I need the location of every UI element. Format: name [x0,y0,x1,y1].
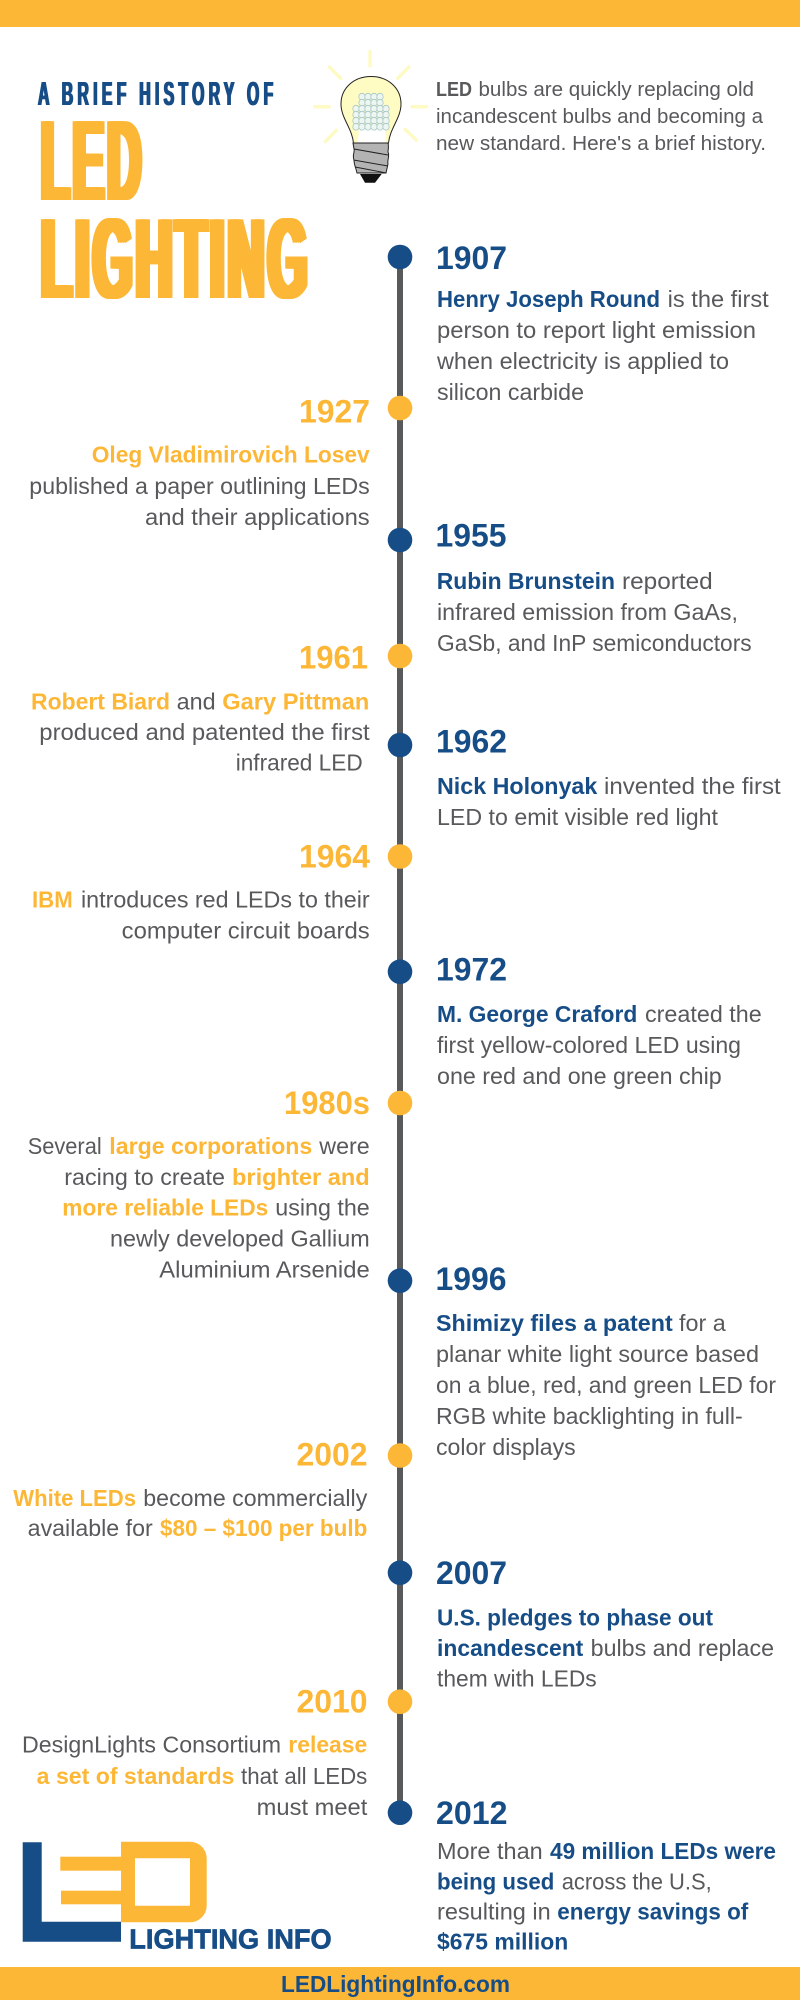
event: 2012: 49 million LEDs were [550,1838,776,1864]
event: 1972: one red and one green chip [437,1063,722,1089]
intro text: LED [436,78,472,101]
event: 1907: Henry Joseph Round [437,286,660,312]
event: 1907: 1907 [436,240,507,276]
event: 2007: incandescent [437,1635,584,1661]
event: 1962: invented the first [604,773,781,799]
event: 1955: GaSb, and InP semiconductors [437,630,752,656]
event: 1972: 1972 [436,952,507,988]
event: 2002: become commercially [143,1485,368,1511]
event: 1980s: newly developed Gallium [110,1226,370,1252]
event: 1996: on a blue, red, and green LED for [436,1372,776,1398]
event: 2007: bulbs and replace [591,1635,774,1661]
event: 2010: release [288,1732,367,1758]
event: 1972: first yellow-colored LED using [437,1032,741,1058]
title: LIGHTING: LIGHTING [41,196,311,323]
event: 1961: produced and patented the first [39,719,370,745]
logo: LED Lighting Info: LIGHTING INFO [129,1923,332,1954]
event: 1907: when electricity is applied to [436,348,729,374]
bottom banner [0,1967,800,2000]
event: 2012: across the U.S, [562,1868,712,1894]
top banner [0,0,800,27]
event: 1980s [28,1085,370,1283]
intro text: new standard. Here's a brief history. [436,132,766,155]
event: 1962: LED to emit visible red light [437,804,719,830]
event: 2002: $80 – $100 per bulb [160,1515,367,1541]
event: 2007: U.S. pledges to phase out [437,1604,713,1630]
event: 1996: for a [679,1310,726,1336]
event: 1964: IBM [32,886,73,912]
event: 2010: must meet [257,1794,368,1820]
event: 1955: Rubin Brunstein [437,568,615,594]
title [38,76,311,323]
event: 1980s: Several [28,1133,102,1159]
event: 1980s: large corporations [109,1133,312,1159]
event: 1996: color displays [436,1434,576,1460]
event: 1996: Shimizy files a patent [436,1310,673,1336]
event: 2010 [22,1684,368,1820]
event: 1955 [436,518,752,656]
event: 1980s: 1980s [284,1085,370,1121]
event: 1961: Gary Pittman [222,688,369,714]
event: 1927 [29,394,370,530]
event: 1964: introduces red LEDs to their [81,886,370,912]
event: 1980s: using the [275,1195,370,1221]
event: 2012: $675 million [437,1928,568,1954]
event: 1955: reported [622,568,713,594]
event: 2010: 2010 [296,1684,368,1720]
event: 1961 [31,640,370,776]
event: 1980s: were [318,1133,370,1159]
event: 1972: created the [645,1001,762,1027]
event: 1972: M. George Craford [437,1001,637,1027]
event: 1996: 1996 [436,1261,506,1297]
event: 1955: 1955 [436,518,506,554]
event: 1961: and [177,688,216,714]
event: 1962: Nick Holonyak [437,773,598,799]
event: 1927: published a paper outlining LEDs [29,473,370,499]
event: 1927: and their applications [145,504,370,530]
event: 2002: available for [28,1515,153,1541]
event: 2010: that all LEDs [241,1763,367,1789]
intro text: bulbs are quickly replacing old [478,78,754,101]
event: 1955: infrared emission from GaAs, [437,599,738,625]
title: a brief history of: A BRIEF HISTORY OF [38,76,277,113]
event: 2010: a set of standards [37,1763,234,1789]
event: 2012: energy savings of [557,1898,749,1924]
event: 2007 [436,1555,774,1692]
event: 1927: Oleg Vladimirovich Losev [92,442,370,468]
event: 1907 [436,240,769,405]
event: 1907: person to report light emission [437,317,756,343]
event: 2012: resulting in [437,1898,551,1924]
event: 2010: DesignLights Consortium [22,1732,281,1758]
event: 2002: White LEDs [13,1485,136,1511]
event: 2012: 2012 [436,1795,508,1831]
title: LED: LED [41,98,144,225]
event: 2002 [13,1437,368,1541]
event: 1964: computer circuit boards [122,917,370,943]
icon: LED light bulb [313,50,428,183]
event: 1980s: Aluminium Arsenide [159,1257,370,1283]
event: 1980s: racing to create [64,1164,225,1190]
event: 1907: silicon carbide [437,379,584,405]
event: 1907: is the first [668,286,769,312]
event: 2012: being used [437,1868,554,1894]
event: 2012 [436,1795,776,1954]
event: 1962 [436,724,781,830]
event: 2007: them with LEDs [437,1666,597,1692]
intro text [436,78,766,155]
event: 1996 [436,1261,776,1460]
event: 1961: 1961 [299,640,368,676]
event: 1962: 1962 [436,724,507,760]
logo: LED Lighting Info [23,1842,332,1954]
event: 1961: Robert Biard [31,688,170,714]
event: 1996: RGB white backlighting in full- [436,1403,743,1429]
event: 1964: 1964 [299,838,370,874]
event: 2012: More than [437,1838,543,1864]
timeline line [397,257,403,1813]
event: 1972 [436,952,762,1089]
timeline dots [388,245,412,1825]
event: 1980s: brighter and [232,1164,370,1190]
website url: LEDLightingInfo.com [281,1971,510,1997]
event: 1980s: more reliable LEDs [62,1195,268,1221]
event: 1996: planar white light source based [436,1341,759,1367]
event: 2007: 2007 [436,1555,507,1591]
event: 1961: infrared LED [236,750,363,776]
intro text: incandescent bulbs and becoming a [436,105,764,128]
event: 1964 [32,838,370,943]
event: 1927: 1927 [299,394,370,430]
event: 2002: 2002 [296,1437,368,1473]
